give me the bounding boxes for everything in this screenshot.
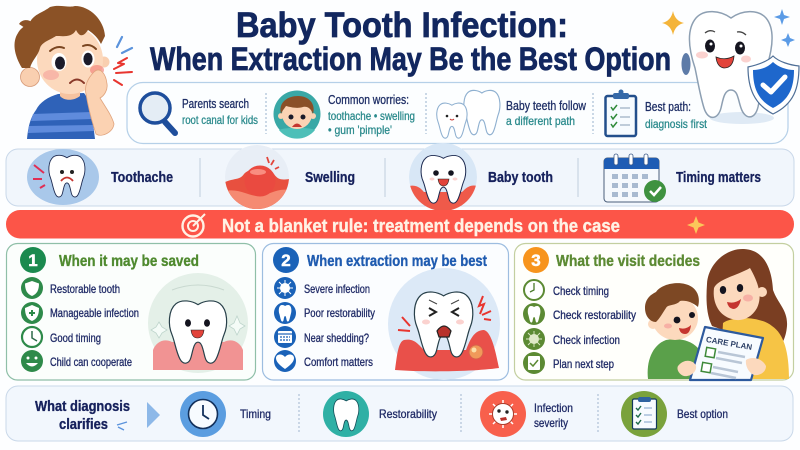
label: infection severity [534,401,573,430]
text: baby teeth follow: a different path [506,114,575,128]
arrow [147,402,160,428]
icon: clock badge [180,391,226,437]
panel 3: what the visit decides [514,244,794,380]
label: infection severity: severity [534,416,568,430]
panel: symptom row [6,143,794,212]
icon: virus [274,277,296,299]
list: visit checks: Plan next step [553,357,614,371]
text: parents search: Parents search [182,97,249,111]
icon: tooth badge [323,391,369,437]
text: banner message: Not a blanket rule: treatment depends on the case [222,215,620,236]
icon: worried boy badge [274,90,320,139]
illustration: mother and child with care plan [645,249,789,380]
icon: smile [21,350,43,372]
label: infection severity: Infection [534,401,573,415]
icon: shield [21,277,43,299]
title: When Extraction May Be the Best Option [150,41,671,77]
number badge 1 [20,247,46,273]
list: visit checks [553,284,636,371]
text: best path: diagnosis first [645,117,708,131]
number badge 2 [273,247,299,273]
icon: baby tooth [409,143,478,212]
heading: what diagnosis clarifies [35,398,130,433]
list: reasons to extract: Poor restorability [304,306,375,320]
text: baby teeth follow [506,99,587,128]
list: visit checks: Check restorability [553,308,636,322]
list: reasons to extract: Comfort matters [304,355,373,369]
text: best path: Best path: [645,100,691,114]
text: baby teeth follow: Baby teeth follow [506,99,587,113]
heading: when it may be saved: When it may be saved [59,253,199,270]
text: common worries [328,93,415,137]
text: common worries: toothache • swelling [328,109,415,123]
heading: what the visit decides: What the visit decides [556,253,700,270]
text: common worries: Common worries: [328,93,409,107]
panel 2: when extraction may be best [262,244,508,380]
text: common worries: • gum 'pimple' [328,123,392,137]
label: baby tooth: Baby tooth [488,170,553,186]
icon: tooth [523,303,545,325]
list: reasons to save: Good timing [50,331,101,345]
number badge 1: 1 [28,251,38,270]
icon: clock [22,327,42,347]
icon: aching tooth [27,149,99,205]
icon: medical shield [21,302,43,324]
text: parents search: root canal for kids [182,113,258,127]
list: reasons to save [50,282,139,369]
icon: germ [523,328,545,350]
icon: happy tooth with shield [662,9,799,124]
icon: calendar with check [604,154,666,202]
icon: clock [524,280,544,300]
label: restorability: Restorability [379,407,437,421]
illustration: healthy tooth in gum [148,273,248,373]
icon: calendar [274,326,296,348]
icon: baby and adult teeth [437,90,500,138]
label: best option: Best option [677,407,728,421]
list: reasons to extract: Near shedding? [304,331,369,345]
heading: when extraction may be best: When extraction may be best [307,253,487,270]
label: swelling: Swelling [305,170,355,186]
title: Baby Tooth Infection: [236,6,568,45]
icon: germ badge [480,391,526,437]
icon: target [182,214,205,236]
heading: what diagnosis clarifies: clarifies [59,416,108,433]
icon: magnifying glass [140,93,175,133]
list: reasons to save: Restorable tooth [50,282,120,296]
illustration: infected tooth [388,268,500,380]
icon: checklist [523,352,545,374]
heading: what diagnosis clarifies: What diagnosis [35,398,130,415]
number badge 3: 3 [531,251,541,270]
icon: clipboard badge [621,391,667,437]
list: reasons to extract [304,282,375,369]
title [150,6,671,77]
icon: swollen gum [225,145,289,210]
list: reasons to extract: Severe infection [304,282,370,296]
icon: sparkle [687,216,705,234]
list: reasons to save: Child can cooperate [50,355,132,369]
list: visit checks: Check timing [553,284,609,298]
banner: not a blanket rule [6,210,794,238]
icon: boy with toothache [15,6,132,139]
list: visit checks: Check infection [553,333,620,347]
icon: clipboard [606,90,636,136]
label: timing: Timing [240,407,271,421]
text: best path [645,100,708,131]
text: parents search [182,97,258,127]
illustration: mother and child with care plan: CARE PLAN [705,335,753,352]
panel: what diagnosis clarifies [6,386,793,441]
icon: heart [274,350,296,372]
number badge 3 [523,247,549,273]
icon: tooth [274,302,296,324]
label: timing matters: Timing matters [676,170,761,186]
label: toothache: Toothache [111,170,173,186]
panel 1: when it may be saved [6,244,256,380]
list: reasons to save: Manageable infection [50,306,139,320]
panel: search and worries strip [127,82,788,144]
number badge 2: 2 [281,251,291,270]
